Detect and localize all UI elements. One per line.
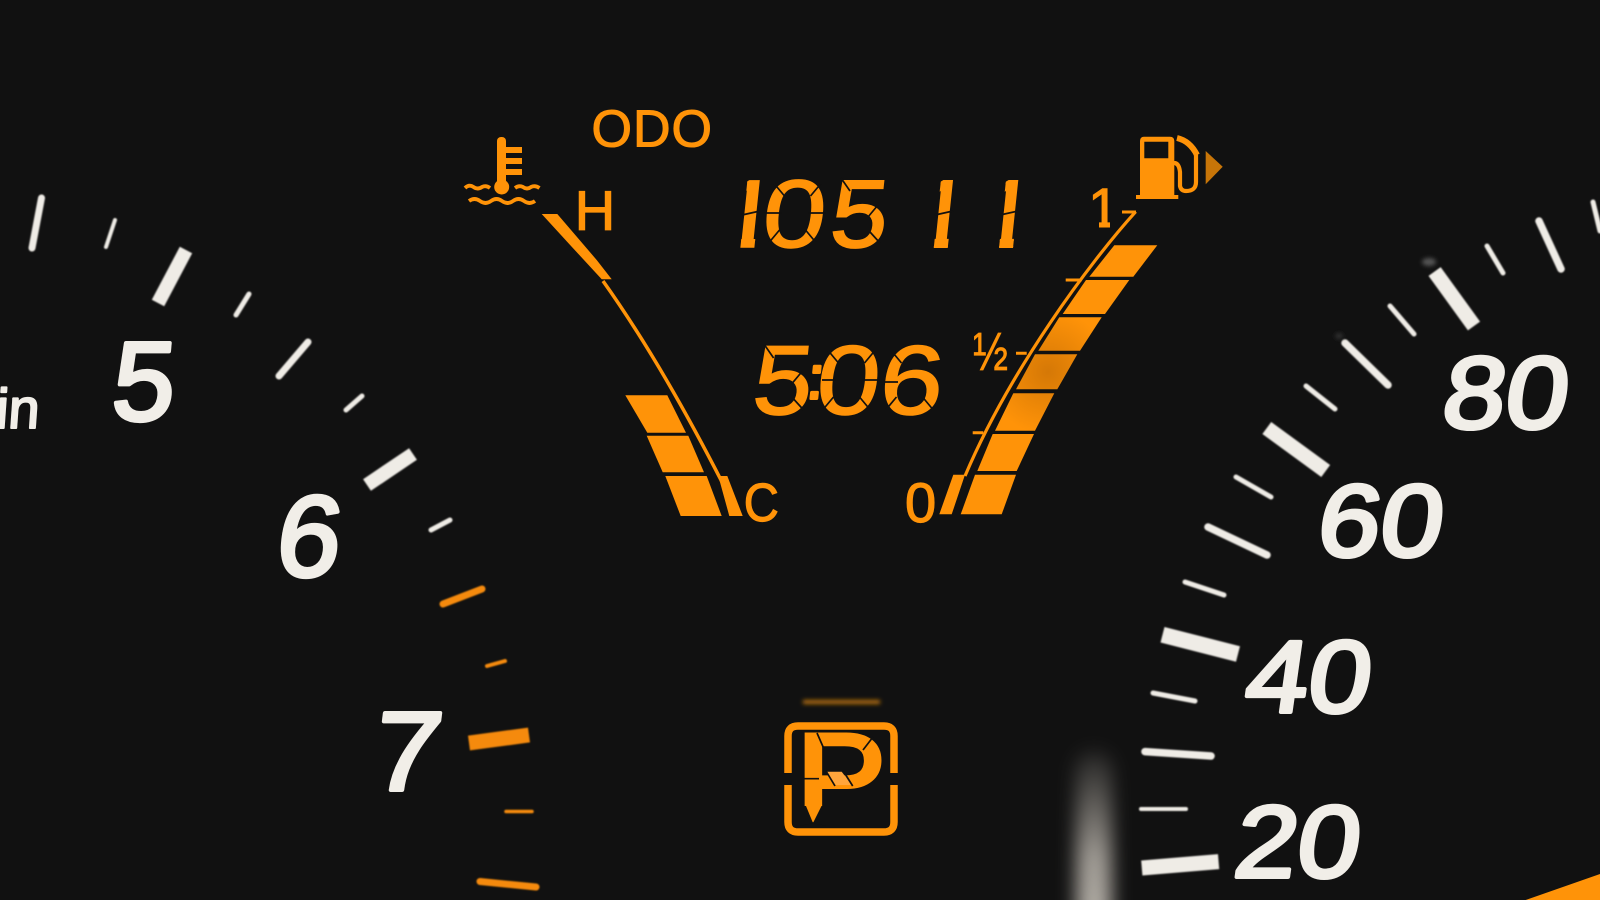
- label 0: 0: [905, 471, 936, 534]
- clock reading: [748, 325, 949, 435]
- tachometer numeral 5: 5: [108, 318, 181, 444]
- gear letter P: P: [796, 709, 886, 847]
- label C: C: [744, 472, 779, 533]
- gear letter segment detail: [800, 733, 873, 826]
- label one half: ½: [973, 322, 1008, 382]
- fuel level bars: [961, 245, 1157, 514]
- tachometer: [0, 198, 536, 887]
- coolant temperature gauge: [465, 137, 779, 533]
- speedometer tick marks: [1141, 202, 1600, 868]
- speedometer numeral 20: 20: [1228, 785, 1369, 899]
- speedometer orange corner sweep: [1526, 874, 1600, 900]
- speedometer needle blur: [1076, 750, 1112, 900]
- odometer reading: 511: [826, 161, 1041, 268]
- arrow: fuel door side: [1206, 151, 1223, 184]
- clock reading: 06: [812, 326, 949, 435]
- odometer label: ODO: [592, 100, 713, 158]
- indicator glow line: [803, 700, 880, 704]
- speedometer numeral 60: 60: [1311, 464, 1452, 578]
- speedometer numeral 80: 80: [1436, 336, 1577, 450]
- clock reading: :: [804, 344, 828, 411]
- odometer reading: 1: [711, 161, 785, 268]
- icon: coolant temperature: [465, 137, 540, 203]
- fuel scale arc: [939, 212, 1136, 514]
- tachometer numeral 7: 7: [366, 689, 449, 814]
- label H: H: [575, 179, 615, 242]
- fuel gauge: [905, 137, 1223, 534]
- odometer reading: 0: [758, 161, 832, 268]
- tachometer tick marks: [32, 198, 536, 887]
- faint reflection spots: [1335, 258, 1436, 339]
- odometer reading: [740, 179, 1018, 249]
- speedometer numeral 40: 40: [1239, 620, 1380, 734]
- clock reading: 5: [748, 325, 819, 435]
- speedometer: [1076, 202, 1600, 900]
- temperature bars: [625, 395, 722, 516]
- icon: fuel pump: [1136, 137, 1197, 199]
- label 1: 1: [1088, 176, 1119, 239]
- temperature scale arc: [542, 214, 743, 516]
- gear indicator: [788, 700, 894, 847]
- tachometer numeral 6: 6: [270, 473, 350, 601]
- gear frame: [788, 726, 894, 832]
